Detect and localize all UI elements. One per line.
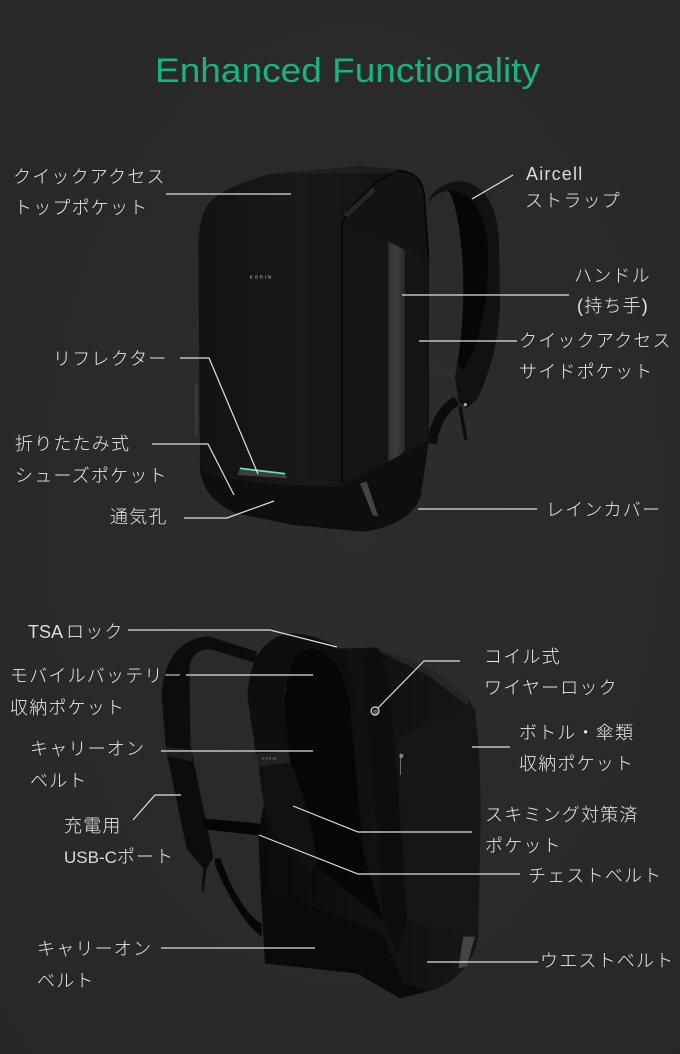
labels [10, 164, 674, 991]
base [200, 440, 428, 532]
line: battery pocket [186, 674, 313, 676]
reflector [237, 468, 287, 478]
near strap [247, 633, 357, 907]
label: battery pocket: 収納ポケット [10, 698, 125, 718]
line: reflector [180, 358, 258, 474]
side panel [342, 171, 428, 487]
label: carry-on belt 2: ベルト [37, 971, 95, 991]
label: aircell strap: ストラップ [525, 191, 621, 211]
backpack: back view [162, 633, 481, 998]
label: shoe pocket: シューズポケット [15, 466, 168, 486]
label: top pocket: クイックアクセス [13, 167, 166, 187]
label: coil lock: コイル式 [484, 647, 561, 667]
label: USB-C: USB-C [64, 848, 117, 867]
line: carry-on belt 1 [161, 750, 313, 752]
zip puller [400, 753, 402, 775]
label: chest belt: チェストベルト [528, 866, 662, 886]
label: shoe pocket: 折りたたみ式 [15, 434, 130, 454]
title: Enhanced Functionality [155, 52, 540, 90]
label: waist belt: ウエストベルト [540, 951, 674, 971]
line: skimming pocket [293, 806, 472, 832]
line: carry-on belt 2 [161, 947, 315, 949]
label: handle: ハンドル [574, 266, 651, 286]
line: rain cover [418, 508, 537, 510]
line: side pocket [419, 340, 517, 342]
label: rain cover: レインカバー [546, 500, 661, 520]
label: aircell strap: Aircell [526, 164, 583, 184]
label: USB-C: ポート [117, 847, 174, 867]
line: vent [184, 501, 274, 518]
shoulder strap [428, 181, 500, 443]
line: waist belt [427, 961, 538, 963]
far strap [162, 637, 257, 892]
label: skimming pocket: スキミング対策済 [485, 805, 639, 825]
line: coil lock [378, 661, 460, 708]
label: side pocket: サイドポケット [519, 362, 653, 382]
top edge [270, 166, 400, 174]
label: side pocket: クイックアクセス [519, 331, 672, 351]
label: battery pocket: モバイルバッテリー [10, 666, 183, 686]
lower webbing and chest strap [215, 858, 262, 937]
label: carry-on belt 1: キャリーオン [30, 739, 145, 759]
zip seam [342, 171, 428, 483]
label: coil lock: ワイヤーロック [484, 678, 618, 698]
waist panel [263, 892, 427, 998]
near strap: KORIN [263, 756, 277, 760]
label: top pocket: トップポケット [14, 198, 148, 218]
label: bottle pocket: ボトル・傘類 [519, 723, 634, 743]
label: vent: 通気孔 [110, 507, 168, 527]
line: TSA lock [128, 630, 337, 647]
label: TSA lock: TSAロック [28, 622, 124, 642]
line: USB-C [133, 795, 181, 820]
label: carry-on belt 2: キャリーオン [37, 939, 152, 959]
line: handle [402, 294, 569, 296]
bag body [198, 166, 429, 532]
label: reflector: リフレクター [53, 349, 167, 369]
line: aircell strap [472, 175, 513, 199]
label: USB-C: 充電用 [64, 816, 122, 836]
marker: coil lock [371, 707, 379, 715]
line: top pocket [166, 193, 291, 195]
label: bottle pocket: 収納ポケット [519, 754, 634, 774]
callout lines [128, 175, 569, 962]
label: handle: (持ち手) [577, 296, 649, 316]
line: bottle pocket [472, 746, 510, 748]
main body [258, 647, 481, 997]
mesh padding [285, 648, 383, 920]
line: shoe pocket [152, 444, 234, 495]
brand: KORIN [250, 275, 273, 280]
backpack: front view [195, 166, 500, 532]
line: chest belt [259, 835, 520, 874]
label: carry-on belt 1: ベルト [30, 771, 88, 791]
label: skimming pocket: ポケット [485, 836, 562, 856]
rear face panel [397, 708, 479, 935]
handle [388, 242, 405, 467]
